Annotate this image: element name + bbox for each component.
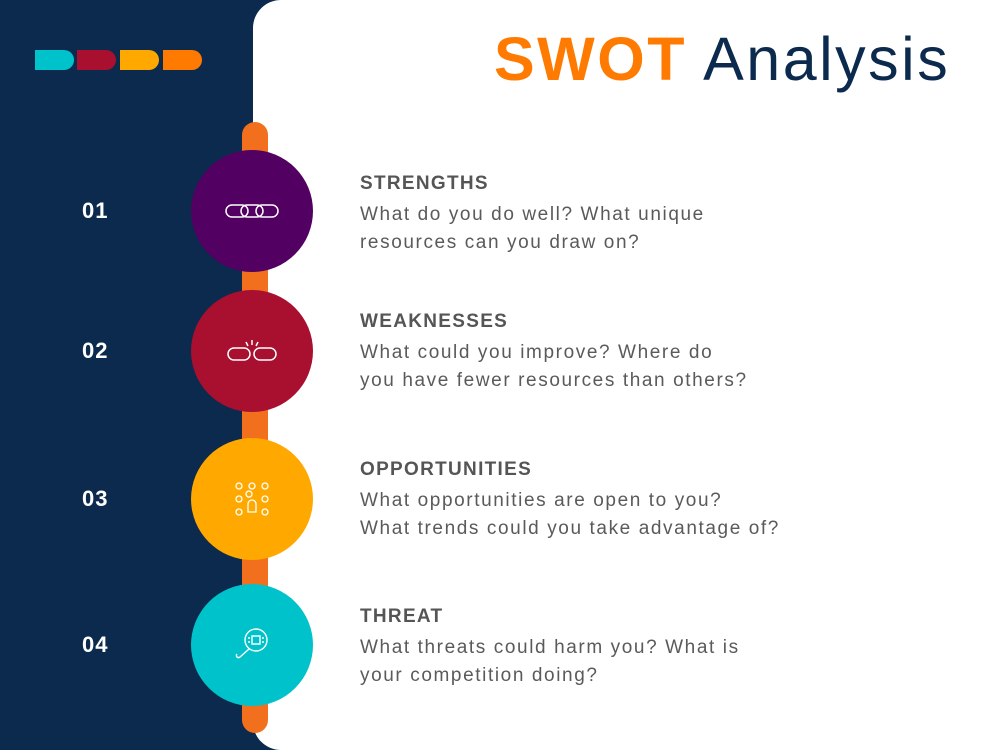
number 04: 04: [82, 632, 108, 657]
text: threat: your competition doing?: [360, 665, 599, 686]
number 03: 03: [82, 486, 108, 511]
circle: strengths chain icon: [191, 150, 313, 272]
text: opportunities: OPPORTUNITIES: [360, 459, 532, 480]
text: weaknesses: you have fewer resources than others?: [360, 370, 748, 391]
white panel: [253, 0, 1000, 750]
text: weaknesses: What could you improve? Where do: [360, 342, 713, 363]
text: threat: THREAT: [360, 606, 443, 627]
text: threat: What threats could harm you? What is: [360, 637, 740, 658]
logo blocks: [35, 50, 202, 70]
text: threat: [360, 606, 740, 686]
text: strengths: resources can you draw on?: [360, 232, 640, 253]
text: strengths: What do you do well? What unique: [360, 204, 705, 225]
number 02: 02: [82, 338, 108, 363]
text: strengths: [360, 173, 705, 253]
text: opportunities: What trends could you take advantage of?: [360, 518, 780, 539]
number 01: 01: [82, 198, 108, 223]
circle: weaknesses broken chain icon: [191, 290, 313, 412]
timeline bar: [242, 122, 268, 733]
circle: opportunities network icon: [191, 438, 313, 560]
text: opportunities: What opportunities are open to you?: [360, 490, 722, 511]
circle: threat bug search icon: [191, 584, 313, 706]
text: weaknesses: [360, 311, 748, 391]
text: strengths: STRENGTHS: [360, 173, 489, 194]
text: weaknesses: WEAKNESSES: [360, 311, 508, 332]
text: opportunities: [360, 459, 780, 539]
title: SWOT Analysis: [494, 25, 950, 93]
